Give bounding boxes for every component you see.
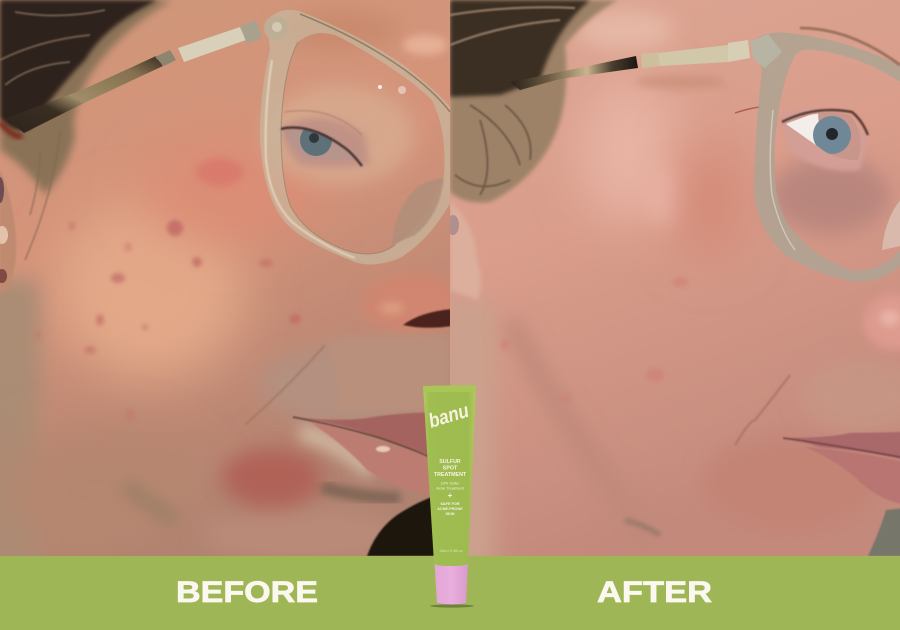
eye under lens (735, 105, 890, 233)
glasses temple arm (510, 40, 750, 90)
label: after: AFTER (597, 576, 712, 609)
tube crimp (423, 385, 476, 392)
label: before: BEFORE (176, 576, 318, 609)
product name: SPOT (443, 466, 458, 472)
product name (434, 459, 467, 478)
product description: 10% Sulfur (440, 480, 460, 486)
chin redness (222, 432, 400, 508)
logo: banu (426, 400, 472, 433)
glasses temple arm (6, 20, 262, 133)
eye under lens (265, 85, 415, 185)
faded marks (501, 277, 688, 403)
glasses frame (260, 10, 452, 265)
skin tones: after (440, 10, 900, 570)
product name: SULFUR (439, 459, 461, 465)
safe for acne-prone skin (437, 502, 463, 516)
acne spots (35, 220, 301, 421)
panel: before photo (0, 0, 462, 580)
product description: Acne Treatment (436, 486, 465, 490)
glasses frame (750, 28, 900, 282)
plus icon: + (448, 491, 453, 500)
skin base: after (450, 0, 900, 556)
lips (292, 412, 430, 494)
safe for acne-prone skin: ACNE-PRONE (437, 507, 463, 511)
panel: after photo (440, 0, 900, 570)
volume: 15mL/.5 Mfl oz (439, 549, 463, 553)
hair (0, 0, 172, 260)
safe for acne-prone skin: SAFE FOR (440, 502, 460, 506)
tube cap (434, 563, 468, 604)
tube body (423, 385, 476, 566)
tube shadow (430, 604, 474, 608)
lips (783, 432, 900, 505)
safe for acne-prone skin: SKIN (445, 512, 455, 516)
skin base: before (0, 0, 450, 556)
skin tones: before (0, 10, 447, 580)
nose (863, 294, 900, 350)
product description (436, 480, 465, 490)
nose (364, 276, 450, 332)
gray background behind chin (868, 508, 900, 556)
cheek-to-lip skin (402, 338, 447, 381)
hair (450, 0, 618, 203)
green label band (0, 556, 900, 630)
red blotch near eye (196, 158, 244, 186)
dark background behind chin (366, 496, 434, 556)
product name: TREATMENT (434, 472, 467, 478)
ear (450, 204, 482, 299)
ear (0, 170, 16, 295)
product tube (423, 385, 476, 608)
